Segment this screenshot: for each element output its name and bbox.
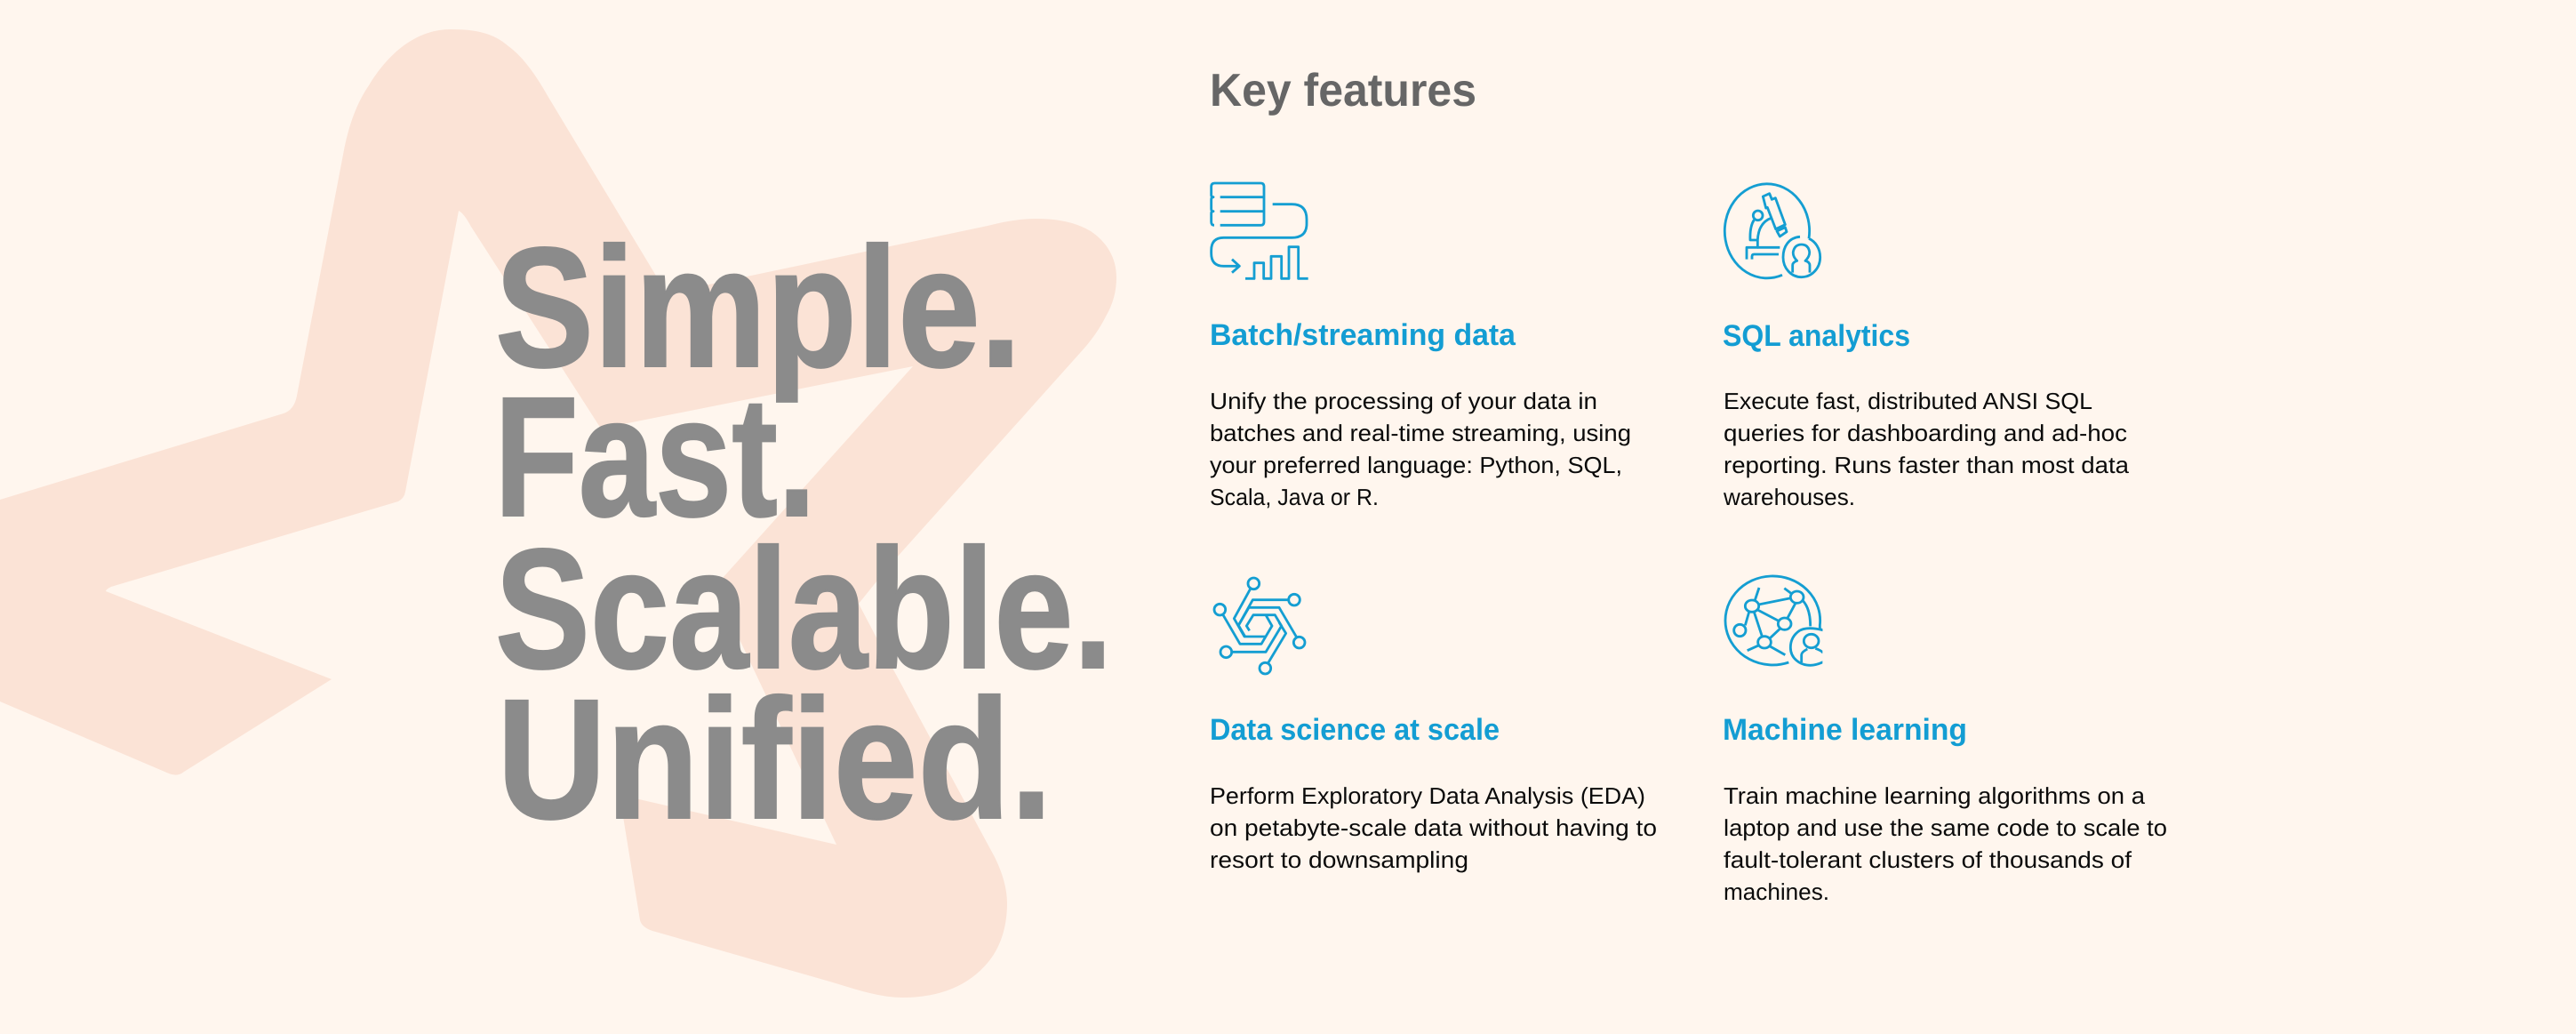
text block: batch description: your preferred language: Python, SQL, xyxy=(1210,452,1622,478)
text block: batch description xyxy=(1210,388,1631,510)
text block: machine learning description: Train machine learning algorithms on a xyxy=(1724,782,2146,809)
panel: Batch/streaming data xyxy=(1210,183,1631,510)
text block: data science description xyxy=(1210,782,1657,873)
text block: data science description: resort to downsampling xyxy=(1210,846,1468,873)
text block: machine learning description: machines. xyxy=(1724,878,1829,905)
panel: SQL analytics xyxy=(1723,184,2130,510)
icon: data stack flowing to bar chart xyxy=(1212,183,1308,278)
text block: SQL description: warehouses. xyxy=(1723,484,1855,510)
title: Simple. Fast. Scalable. Unified.: Fast. xyxy=(494,361,816,552)
text block: machine learning description: laptop and use the same code to scale to xyxy=(1724,814,2167,841)
title: Simple. Fast. Scalable. Unified. xyxy=(494,212,1113,854)
text block: batch description: batches and real-time streaming, using xyxy=(1210,420,1631,446)
text block: SQL description: reporting. Runs faster than most data xyxy=(1724,452,2130,478)
text block: SQL description: Execute fast, distributed ANSI SQL xyxy=(1724,388,2092,414)
title: Simple. Fast. Scalable. Unified.: Scalable. xyxy=(495,513,1113,704)
title: Simple. Fast. Scalable. Unified.: Simple. xyxy=(495,212,1021,403)
heading: Machine learning: Machine learning xyxy=(1723,713,1967,747)
text block: data science description: Perform Exploratory Data Analysis (EDA) xyxy=(1210,782,1645,809)
text block: machine learning description xyxy=(1724,782,2167,905)
text block: machine learning description: fault-tolerant clusters of thousands of xyxy=(1724,846,2132,873)
heading: Batch/streaming data: Batch/streaming data xyxy=(1210,318,1516,352)
title: Simple. Fast. Scalable. Unified.: Unified. xyxy=(497,663,1052,854)
panel: Machine learning xyxy=(1723,576,2167,905)
icon: hexagonal circuit spiral xyxy=(1214,578,1305,674)
text block: batch description: Unify the processing of your data in xyxy=(1210,388,1597,414)
heading: SQL analytics: SQL analytics xyxy=(1723,319,1910,353)
panel: Data science at scale xyxy=(1210,578,1657,873)
text block: SQL description xyxy=(1723,388,2130,510)
heading: Key features: Key features xyxy=(1210,65,1476,116)
icon: microscope with person xyxy=(1724,184,1820,278)
text block: SQL description: queries for dashboarding and ad-hoc xyxy=(1724,420,2127,446)
text block: data science description: on petabyte-scale data without having to xyxy=(1210,814,1657,841)
icon: network globe with person xyxy=(1725,576,1824,665)
background star shape xyxy=(0,29,1116,998)
heading: Data science at scale: Data science at scale xyxy=(1210,713,1500,747)
text block: batch description: Scala, Java or R. xyxy=(1210,484,1379,510)
